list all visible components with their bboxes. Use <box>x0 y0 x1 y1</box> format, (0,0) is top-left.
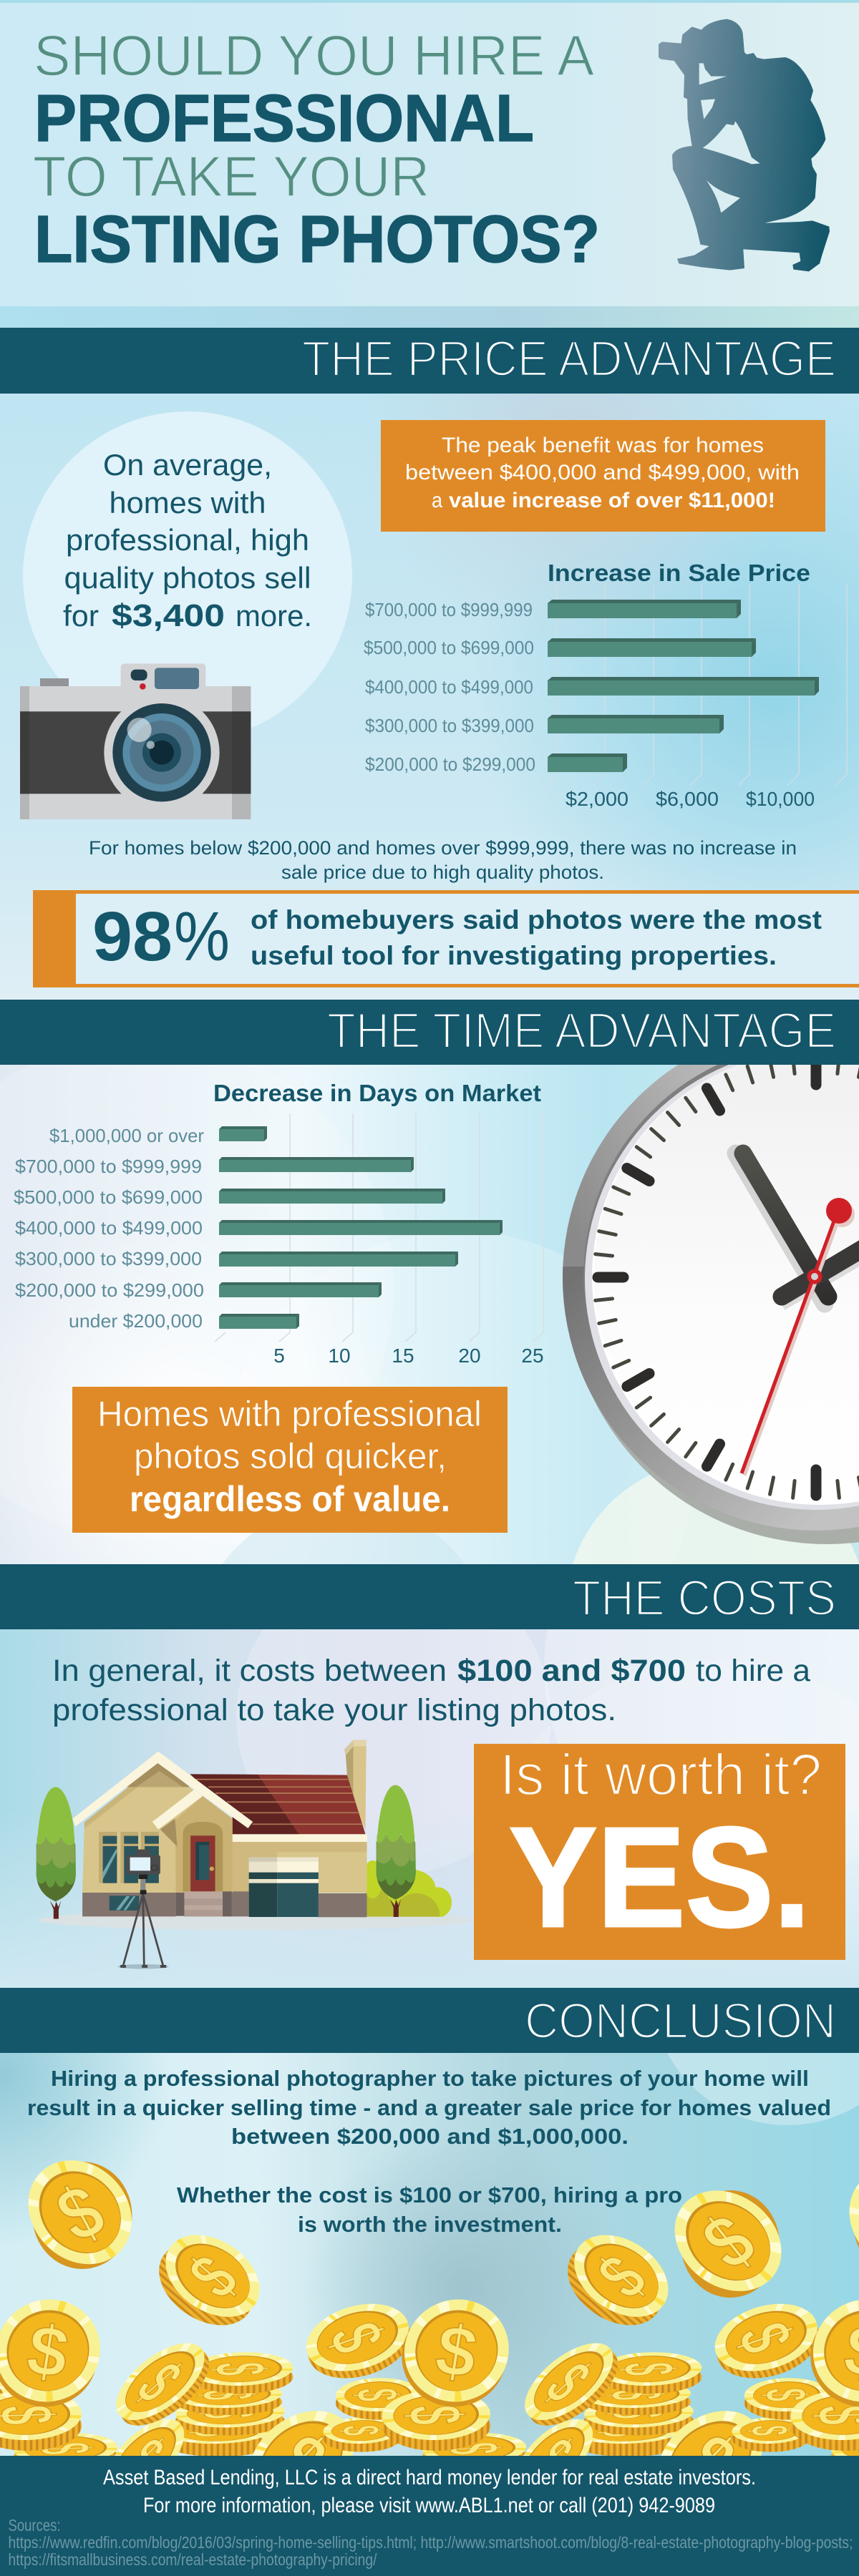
text: conclusion summary: result in a quicker selling time - and a greater sale price for homes valued <box>27 2095 831 2120</box>
callout: average price circle: On average, <box>103 448 272 482</box>
bar chart: increase in sale price: $400,000 to $499,000 <box>365 676 533 698</box>
bar chart: increase in sale price: $10,000 <box>746 788 815 810</box>
title: SHOULD YOU HIRE A <box>34 24 595 87</box>
callout: average price circle: $3,400 <box>112 598 225 633</box>
title: TO TAKE YOUR <box>33 145 430 208</box>
bar chart: decrease in days on market: 15 <box>392 1345 414 1367</box>
text: conclusion summary: Whether the cost is $100 or $700, hiring a pro <box>177 2182 682 2207</box>
callout: is it worth it: YES. <box>509 1798 810 1957</box>
illustration: gold coins <box>0 2145 859 2525</box>
callout: 98% of homebuyers: 98 <box>92 897 173 975</box>
bar chart: decrease in days on market: 5 <box>273 1345 285 1367</box>
bar chart: increase in sale price: Increase in Sale Price <box>548 560 810 586</box>
footer: Asset Based Lending, LLC is a direct hard money lender for real estate investors. <box>103 2466 756 2489</box>
title: LISTING PHOTOS? <box>34 202 600 276</box>
callout: sold quicker: Homes with professional <box>97 1394 482 1434</box>
callout: 98% of homebuyers: % <box>174 897 230 975</box>
callout: peak benefit <box>381 420 825 532</box>
text: conclusion summary: Hiring a professional photographer to take pictures of your home will <box>51 2066 809 2091</box>
section background: costs <box>0 1629 859 1988</box>
callout: peak benefit: between $400,000 and $499,000, with <box>405 461 800 484</box>
title background <box>0 0 859 328</box>
callout: sold quicker <box>72 1387 508 1533</box>
bar chart: decrease in days on market <box>14 1080 544 1367</box>
icon: wall clock <box>563 1024 859 1544</box>
callout: peak benefit: The peak benefit was for homes <box>442 434 764 457</box>
callout: average price circle: more. <box>236 599 312 633</box>
callout: sold quicker: regardless of value. <box>130 1479 450 1519</box>
callout: average price circle: quality photos sell <box>64 561 311 595</box>
callout: peak benefit: value increase of over $11,000! <box>449 489 775 512</box>
bar chart: decrease in days on market: 10 <box>328 1345 351 1367</box>
bar chart: increase in sale price: $700,000 to $999,999 <box>365 599 533 620</box>
text: cost range: In general, it costs between <box>52 1654 447 1688</box>
section background: price <box>0 394 859 1000</box>
callout: is it worth it <box>474 1742 845 1960</box>
text: conclusion summary: between $200,000 and $1,000,000. <box>231 2124 629 2149</box>
callout: 98% of homebuyers: useful tool for investigating properties. <box>251 941 777 970</box>
text: cost range: professional to take your listing photos. <box>52 1693 616 1727</box>
text: conclusion summary: is worth the investment. <box>298 2212 562 2237</box>
callout: average price circle: homes with <box>109 486 266 519</box>
callout: is it worth it: Is it worth it? <box>500 1742 822 1807</box>
footer: For more information, please visit www.ABL1.net or call (201) 942-9089 <box>143 2494 715 2517</box>
bar chart: increase in sale price: $200,000 to $299,000 <box>365 753 535 775</box>
callout: average price circle: professional, high <box>66 523 309 557</box>
callout: sold quicker: photos sold quicker, <box>134 1436 447 1476</box>
bar chart: decrease in days on market: $700,000 to $999,999 <box>15 1156 202 1177</box>
text: no increase note: For homes below $200,000 and homes over $999,999, there was no increase in <box>89 837 797 859</box>
icon: camera <box>20 663 251 819</box>
text: cost range: $100 and $700 <box>457 1654 686 1688</box>
callout: peak benefit: a <box>432 489 442 512</box>
heading: the time advantage: THE TIME ADVANTAGE <box>327 1002 836 1058</box>
heading: conclusion <box>0 1988 859 2053</box>
text: no increase note: sale price due to high quality photos. <box>281 862 604 883</box>
text: cost range: to hire a <box>696 1654 810 1688</box>
callout: average price circle <box>23 411 352 741</box>
title <box>33 24 600 276</box>
bar chart: increase in sale price: $6,000 <box>656 788 719 810</box>
bar chart: decrease in days on market: $500,000 to $699,000 <box>14 1186 203 1208</box>
heading: the time advantage <box>0 1000 859 1065</box>
text: conclusion summary <box>27 2066 831 2237</box>
icon: photographer silhouette <box>659 19 830 271</box>
bar chart: increase in sale price: $2,000 <box>566 788 629 810</box>
title: PROFESSIONAL <box>34 81 534 155</box>
bar chart: decrease in days on market: under $200,000 <box>69 1310 203 1332</box>
bar chart: decrease in days on market: $300,000 to $399,000 <box>15 1248 202 1269</box>
callout: 98% of homebuyers: of homebuyers said photos were the most <box>251 905 822 935</box>
bar chart: decrease in days on market: $1,000,000 or over <box>49 1125 204 1146</box>
callout: average price circle: for <box>63 599 99 633</box>
bar chart: decrease in days on market: 25 <box>521 1345 544 1367</box>
heading: conclusion: CONCLUSION <box>525 1993 836 2049</box>
illustration: house with tripod camera <box>37 1740 472 1969</box>
footer: Sources: <box>9 2516 60 2534</box>
callout: 98% of homebuyers <box>33 890 859 987</box>
section background: time <box>0 1065 859 1564</box>
heading: the costs: THE COSTS <box>573 1570 836 1626</box>
bar chart: decrease in days on market: Decrease in Days on Market <box>213 1080 541 1106</box>
footer <box>0 2456 859 2576</box>
bar chart: increase in sale price <box>364 560 847 810</box>
bar chart: decrease in days on market: $200,000 to $299,000 <box>15 1279 204 1301</box>
bar chart: decrease in days on market: $400,000 to $499,000 <box>15 1217 203 1239</box>
bar chart: increase in sale price: $500,000 to $699,000 <box>364 637 534 658</box>
bar chart: decrease in days on market: 20 <box>458 1345 481 1367</box>
section background: conclusion <box>0 2053 859 2456</box>
heading: the price advantage <box>0 328 859 394</box>
heading: the costs <box>0 1564 859 1629</box>
bar chart: increase in sale price: $300,000 to $399,000 <box>365 715 534 736</box>
text: no increase note <box>89 837 797 883</box>
text: cost range <box>52 1654 810 1727</box>
footer: https://fitsmallbusiness.com/real-estate-photography-pricing/ <box>9 2550 377 2569</box>
